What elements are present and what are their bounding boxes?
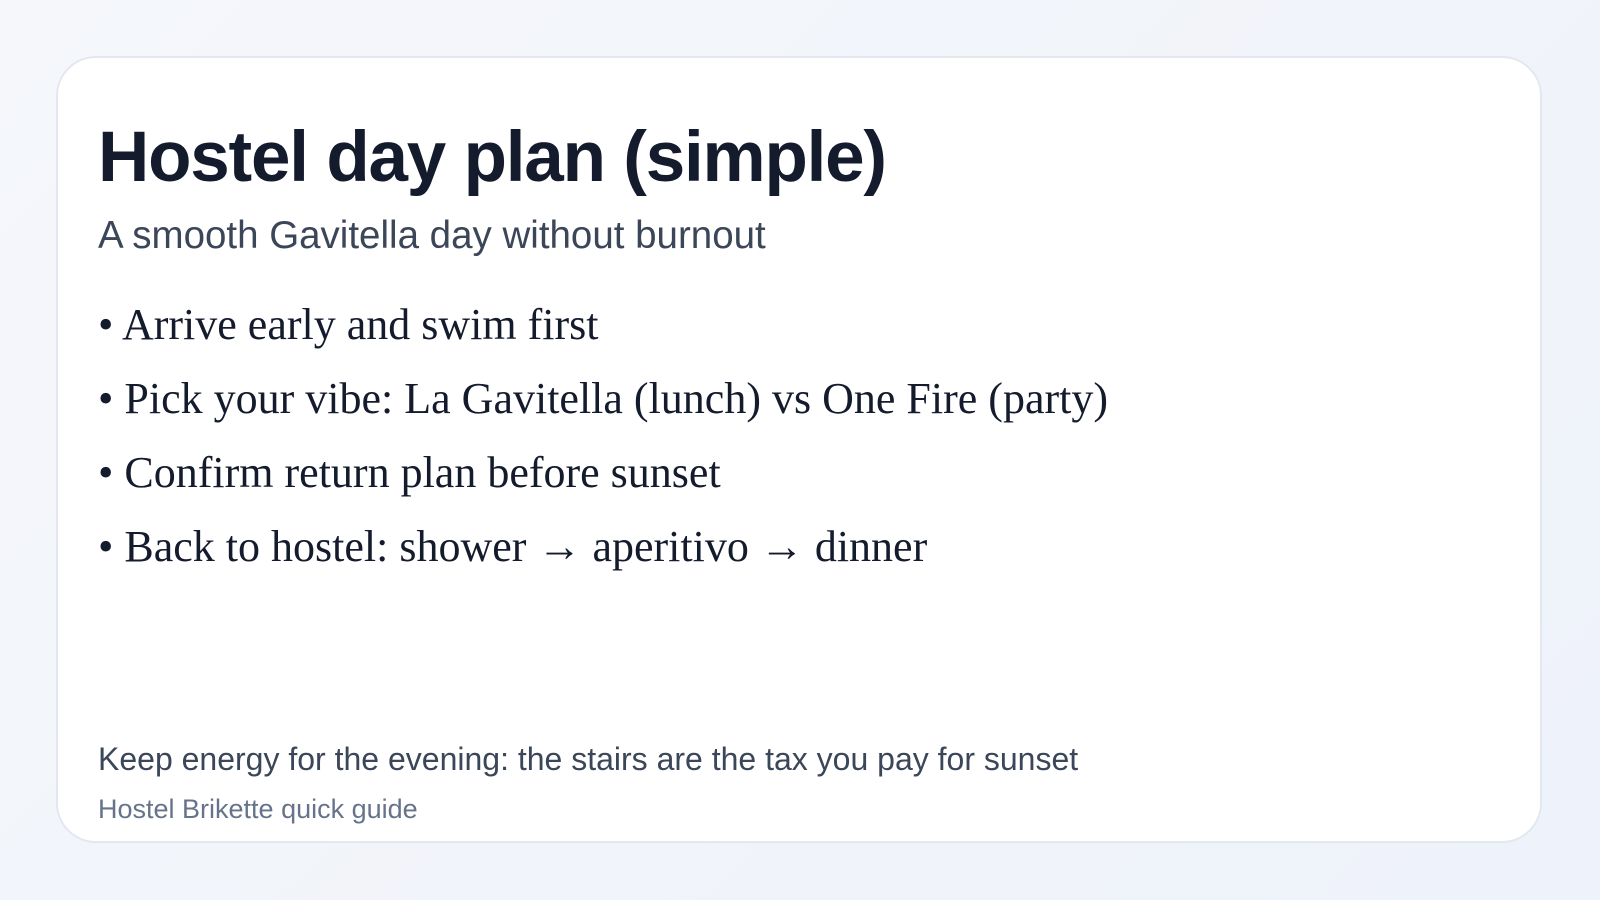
bullet list [98,300,1108,571]
title: Hostel day plan (simple) [98,118,886,197]
source credit: Hostel Brikette quick guide [98,794,418,824]
bullet 4: • Back to hostel: shower → aperitivo → dinner [98,522,927,571]
footer note: Keep energy for the evening: the stairs are the tax you pay for sunset [98,741,1078,777]
bullet 2: • Pick your vibe: La Gavitella (lunch) vs One Fire (party) [98,374,1108,423]
bullet 3: • Confirm return plan before sunset [98,448,721,497]
subtitle: A smooth Gavitella day without burnout [98,214,766,257]
bullet 1: • Arrive early and swim first [98,300,598,349]
